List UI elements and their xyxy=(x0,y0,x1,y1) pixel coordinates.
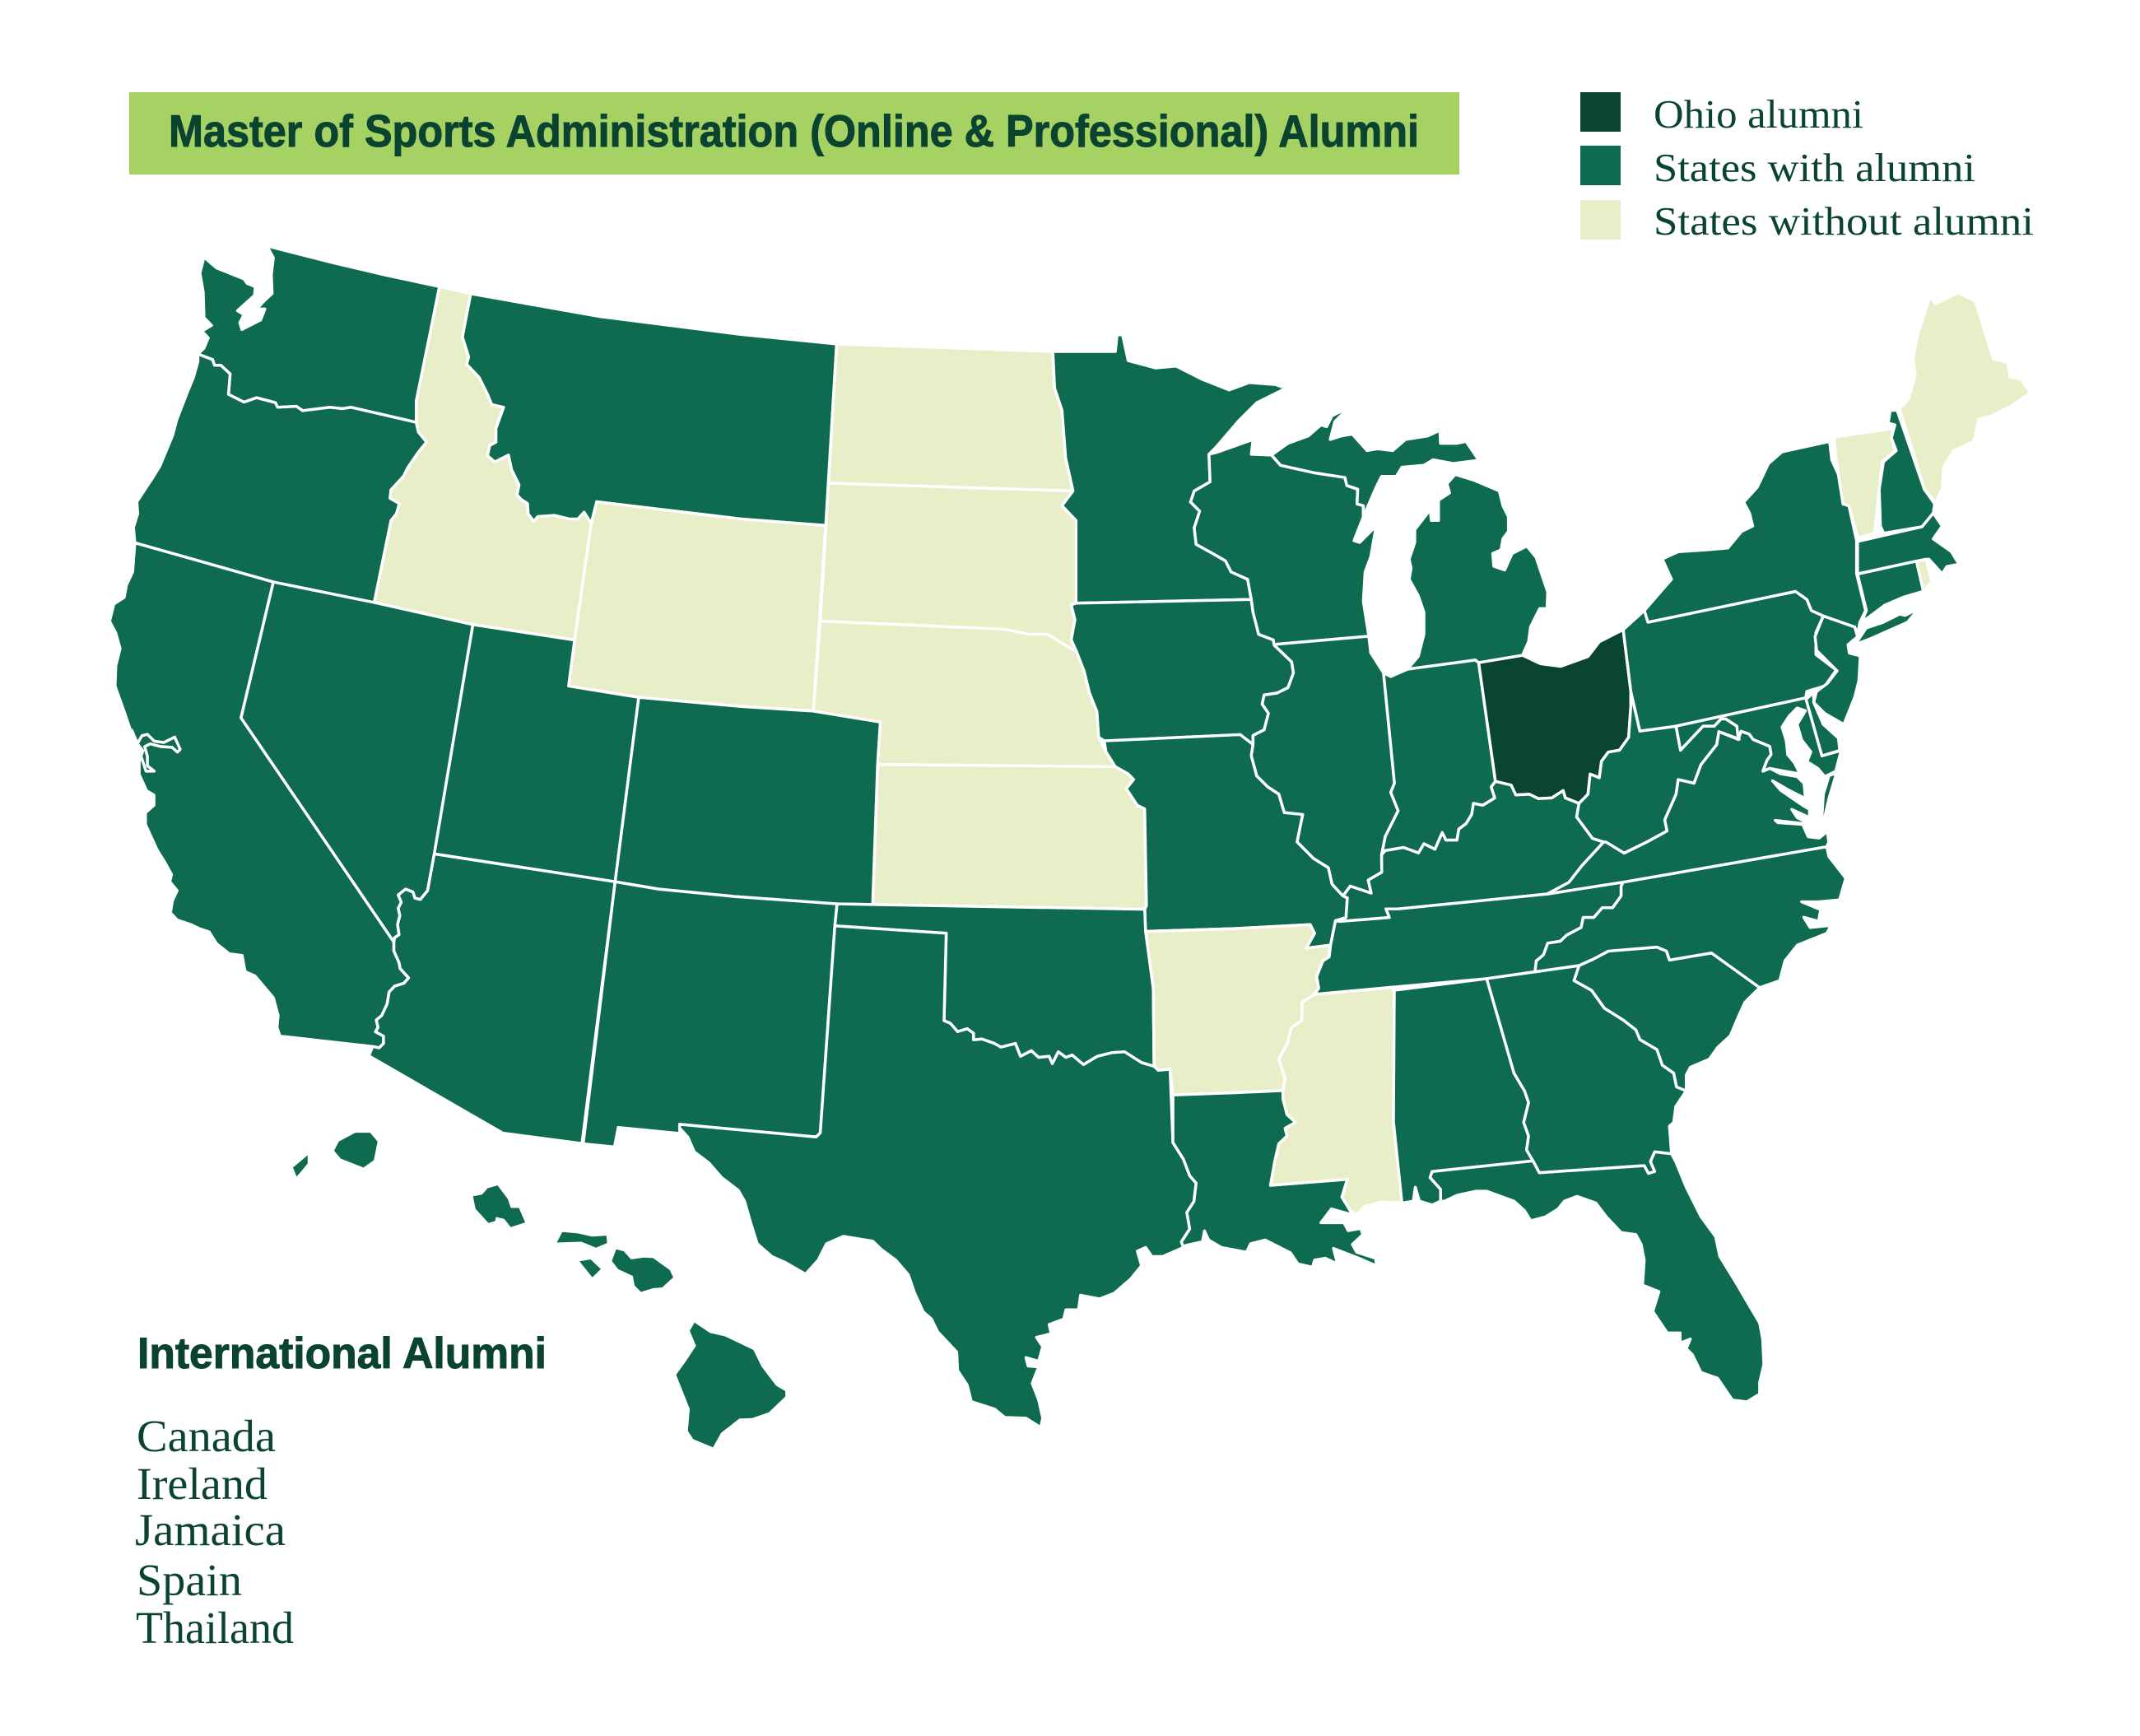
international alumni list: Canada xyxy=(137,1411,276,1461)
title banner xyxy=(129,92,1459,175)
state: Ohio xyxy=(1478,630,1631,803)
state: Wyoming xyxy=(569,502,826,711)
state: Michigan xyxy=(1272,407,1547,669)
state: Colorado xyxy=(615,697,881,905)
Niihau xyxy=(293,1156,308,1176)
state: Connecticut xyxy=(1858,561,1924,621)
state: Indiana xyxy=(1382,660,1496,855)
state: Virginia xyxy=(1547,731,1835,894)
state: Idaho xyxy=(374,286,591,640)
state: Louisiana xyxy=(1173,1091,1377,1267)
state: West Virginia xyxy=(1577,691,1739,853)
state: Georgia xyxy=(1486,966,1686,1174)
state: Illinois xyxy=(1251,636,1398,896)
state: Kansas xyxy=(872,765,1147,910)
legend item: States with alumni: States with alumni xyxy=(1654,145,1975,190)
state: Nebraska xyxy=(813,621,1115,766)
state: Missouri xyxy=(1104,734,1347,948)
international alumni list xyxy=(135,1411,294,1653)
state: Montana xyxy=(463,294,836,525)
Big Island xyxy=(676,1323,785,1447)
state: Tennessee xyxy=(1314,882,1623,994)
Kauai xyxy=(334,1133,378,1167)
state: Texas xyxy=(680,926,1196,1427)
state: Alabama xyxy=(1393,979,1533,1205)
international alumni list: Thailand xyxy=(136,1603,294,1653)
state: Washington xyxy=(198,246,440,422)
state: New York xyxy=(1645,441,1914,641)
state: Maine xyxy=(1900,293,2031,502)
state: Minnesota xyxy=(1053,335,1286,603)
international alumni heading: International Alumni xyxy=(137,1329,547,1378)
state: Utah xyxy=(435,625,639,882)
state: Wisconsin xyxy=(1190,440,1376,645)
international alumni list: Ireland xyxy=(137,1459,268,1509)
state: Arizona xyxy=(369,854,615,1143)
Molokai xyxy=(557,1232,607,1248)
international alumni list: Jamaica xyxy=(135,1505,286,1555)
legend item: States without alumni: States without alumni xyxy=(1654,198,2034,244)
state: Rhode Island xyxy=(1916,559,1932,591)
state: Hawaii xyxy=(293,1133,785,1447)
state: Mississippi xyxy=(1271,987,1402,1215)
international alumni list: Spain xyxy=(137,1555,242,1605)
state: Oregon xyxy=(133,354,426,603)
state: Iowa xyxy=(1072,599,1293,745)
state: North Carolina xyxy=(1535,847,1846,988)
state: Kentucky xyxy=(1340,781,1603,921)
map of the United States xyxy=(109,246,2031,1447)
state: Nevada xyxy=(241,582,473,942)
state: South Dakota xyxy=(821,483,1077,652)
Long Island xyxy=(1859,613,1914,641)
Oahu xyxy=(473,1185,525,1227)
state: Vermont xyxy=(1834,429,1895,538)
state: Oklahoma xyxy=(835,904,1154,1066)
state: South Carolina xyxy=(1574,947,1760,1091)
state: Arkansas xyxy=(1146,924,1331,1095)
title banner: Master of Sports Administration (Online & Professional) Alumni xyxy=(169,105,1419,156)
state: Massachusetts xyxy=(1858,513,1979,574)
Lanai xyxy=(579,1259,601,1278)
state: Maryland xyxy=(1676,698,1841,777)
state: North Dakota xyxy=(829,344,1073,491)
state: New Jersey xyxy=(1814,616,1860,724)
state: New Hampshire xyxy=(1879,410,1934,533)
legend xyxy=(1580,91,2034,244)
state: New Mexico xyxy=(584,882,837,1147)
Maui xyxy=(612,1250,673,1292)
state: Florida xyxy=(1430,1152,1764,1402)
state: Delaware xyxy=(1805,693,1840,756)
legend item: Ohio alumni: Ohio alumni xyxy=(1654,91,1863,137)
state: California xyxy=(109,542,408,1048)
Michigan upper peninsula xyxy=(1272,407,1492,517)
Michigan lower peninsula xyxy=(1407,474,1547,669)
state: Pennsylvania xyxy=(1623,591,1836,731)
